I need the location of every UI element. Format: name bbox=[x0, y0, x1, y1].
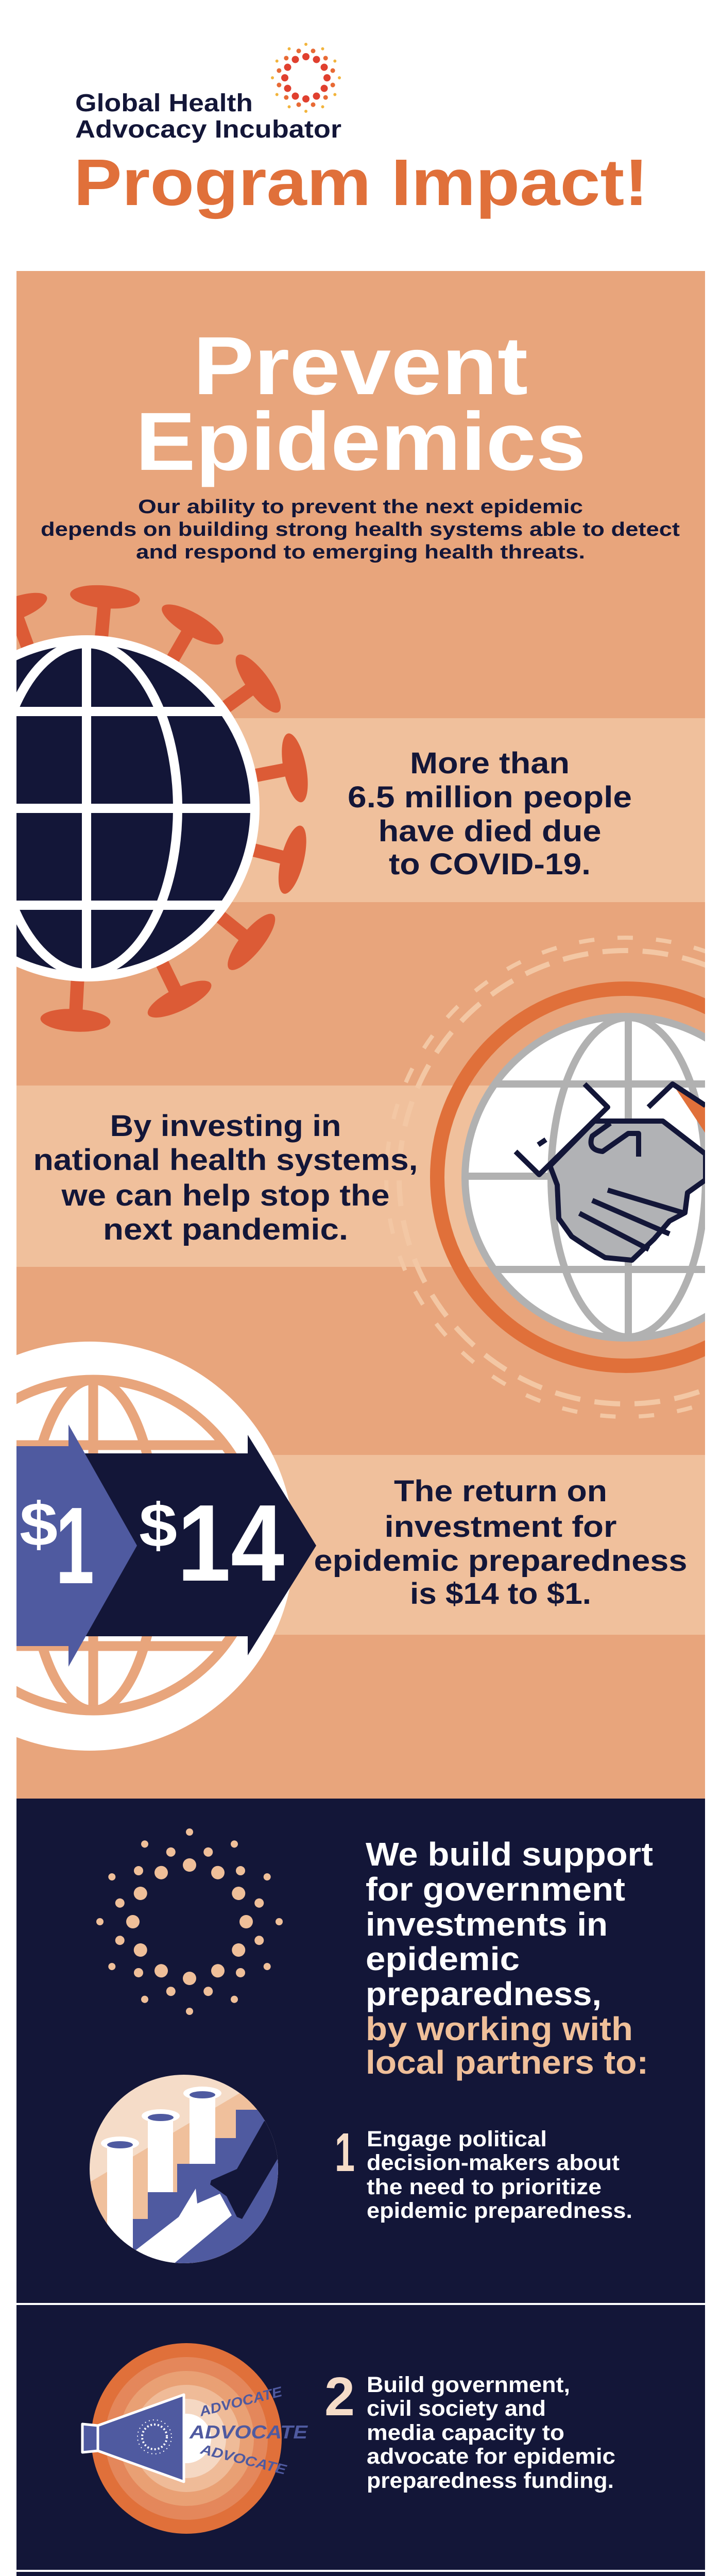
icon: ROI globe with arrows: $ bbox=[139, 1491, 177, 1560]
stat: ROI bbox=[314, 1475, 687, 1611]
stat: invest: next pandemic. bbox=[103, 1213, 348, 1246]
stat: deaths: 6.5 million people bbox=[348, 781, 632, 814]
item 1 bbox=[335, 2122, 632, 2223]
stat: deaths: More than bbox=[410, 747, 570, 780]
icon: ROI globe with arrows: $ bbox=[20, 1490, 58, 1559]
stat: invest: By investing in bbox=[110, 1109, 341, 1143]
icon: stairs and hands bbox=[90, 2075, 278, 2263]
heading: Prevent Epidemics: Prevent bbox=[193, 319, 528, 412]
heading: Prevent Epidemics bbox=[141, 337, 582, 487]
icon: megaphone: ADVOCATE bbox=[197, 2384, 284, 2419]
heading: we build support: preparedness, bbox=[366, 1975, 602, 2012]
icon: dot ring bbox=[96, 1828, 283, 2015]
logo bbox=[75, 43, 341, 143]
heading: we build support: epidemic bbox=[366, 1940, 520, 1977]
stat: deaths: to COVID-19. bbox=[389, 848, 591, 881]
stat: deaths: have died due bbox=[378, 815, 602, 848]
intro text: Our ability to prevent the next epidemic bbox=[138, 496, 583, 518]
icon: virus globe bbox=[0, 583, 313, 1033]
item 1: the need to prioritize bbox=[367, 2175, 602, 2199]
heading: Prevent Epidemics: Epidemics bbox=[135, 395, 586, 487]
arrow: $1 bbox=[10, 1425, 137, 1667]
icon: ROI globe with arrows bbox=[0, 1342, 316, 1751]
band 2 bbox=[16, 1086, 433, 1267]
icon: handshake globe bbox=[386, 938, 721, 1417]
intro text: and respond to emerging health threats. bbox=[136, 541, 585, 563]
icon: hands bbox=[516, 1084, 706, 1260]
stat: invest: we can help stop the bbox=[61, 1179, 390, 1212]
heading: we build support: local partners to: bbox=[366, 2044, 648, 2081]
title: Program Impact! bbox=[74, 146, 648, 219]
item 1: epidemic preparedness. bbox=[367, 2198, 632, 2223]
stat: invest bbox=[33, 1109, 418, 1246]
panel: prevent epidemics bbox=[0, 271, 721, 1799]
logo wordmark bbox=[75, 90, 341, 143]
stat: ROI: The return on bbox=[394, 1475, 607, 1508]
arrow: $14 bbox=[77, 1435, 316, 1655]
icon: megaphone: ADVOCATE bbox=[198, 2441, 288, 2478]
item 2 bbox=[324, 2366, 615, 2493]
stat: deaths bbox=[348, 747, 632, 881]
intro text bbox=[41, 496, 680, 563]
item 2: Build government, bbox=[367, 2372, 570, 2397]
logo wordmark: Advocacy Incubator bbox=[75, 116, 341, 143]
icon: megaphone: ADVOCATE bbox=[189, 2421, 308, 2443]
logo wordmark: Global Health bbox=[75, 90, 253, 117]
item 2: advocate for epidemic bbox=[367, 2444, 615, 2469]
item 2: 2 bbox=[324, 2366, 355, 2427]
stat: ROI: investment for bbox=[384, 1510, 617, 1544]
icon: ROI globe with arrows: 1 bbox=[56, 1484, 94, 1606]
heading: we build support: We build support bbox=[366, 1836, 653, 1873]
heading: we build support: for government bbox=[366, 1871, 625, 1908]
stat: invest: national health systems, bbox=[33, 1143, 418, 1177]
heading: we build support: investments in bbox=[366, 1906, 608, 1943]
item 1: Engage political bbox=[367, 2127, 547, 2151]
item 1: 1 bbox=[335, 2122, 355, 2183]
panel: navy actions bbox=[16, 1799, 705, 2576]
intro text: depends on building strong health systems able to detect bbox=[41, 519, 680, 540]
stat: ROI: is $14 to $1. bbox=[410, 1577, 591, 1611]
item 2: civil society and bbox=[367, 2396, 546, 2421]
item 1: decision-makers about bbox=[367, 2150, 620, 2175]
heading: we build support: by working with bbox=[366, 2010, 633, 2047]
heading: we build support bbox=[366, 1836, 653, 2081]
icon: megaphone bbox=[82, 2343, 308, 2534]
item 2: media capacity to bbox=[367, 2420, 564, 2445]
dividers bbox=[16, 2303, 705, 2576]
icon: ROI globe with arrows: 14 bbox=[177, 1482, 284, 1604]
band 1 bbox=[232, 718, 705, 902]
band 3 bbox=[273, 1455, 705, 1635]
stat: ROI: epidemic preparedness bbox=[314, 1544, 687, 1578]
item 2: preparedness funding. bbox=[367, 2468, 614, 2493]
logo dot ring bbox=[271, 43, 341, 113]
